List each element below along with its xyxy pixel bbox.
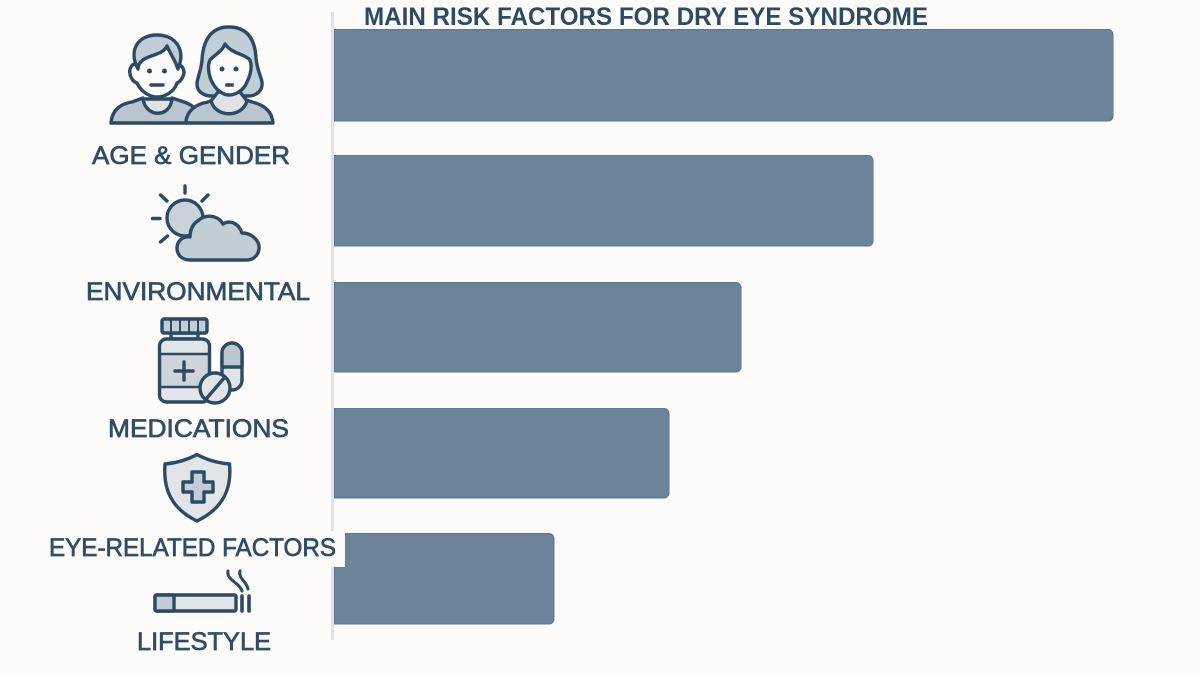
bar chart bbox=[334, 30, 1113, 624]
label: eye-related factors: EYE-RELATED FACTORS bbox=[49, 534, 336, 562]
label: age & gender: AGE & GENDER bbox=[92, 142, 290, 170]
icon: medication bottle and pills bbox=[160, 319, 242, 403]
icon: cigarette bbox=[155, 571, 249, 611]
title: MAIN RISK FACTORS FOR DRY EYE SYNDROME bbox=[364, 3, 928, 31]
icon: man and woman bbox=[111, 27, 273, 123]
bar: age & gender bbox=[334, 30, 1113, 121]
bar: eye-related factors bbox=[334, 408, 669, 498]
label: lifestyle: LIFESTYLE bbox=[137, 628, 271, 656]
label: environmental: ENVIRONMENTAL bbox=[86, 278, 310, 306]
bar: lifestyle bbox=[334, 534, 554, 624]
bar: medications bbox=[334, 282, 741, 372]
bar: environmental bbox=[334, 156, 873, 246]
icon: shield with cross bbox=[165, 454, 230, 521]
label: medications: MEDICATIONS bbox=[108, 415, 289, 443]
icon: sun and cloud bbox=[152, 186, 259, 260]
white patch behind label bbox=[48, 531, 345, 567]
